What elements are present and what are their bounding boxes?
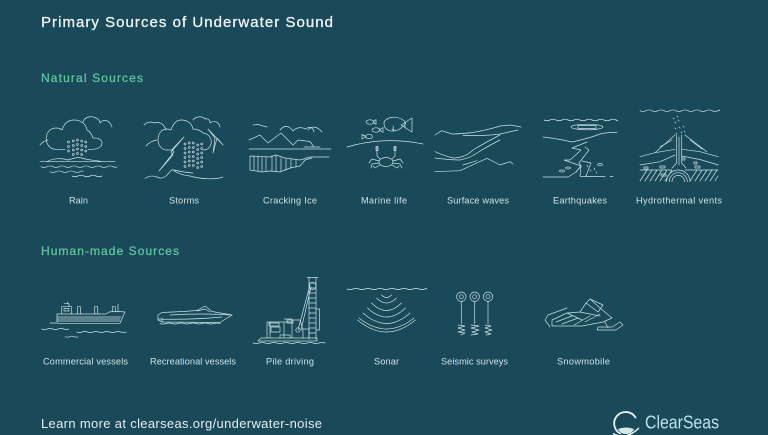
title: Primary Sources of Underwater Sound (41, 14, 333, 31)
label: storms: Storms (169, 196, 199, 206)
label: hydrothermal vents: Hydrothermal vents (636, 196, 722, 206)
icon: marine life (347, 117, 423, 168)
icon: seismic surveys (457, 292, 493, 335)
heading: human-made sources: Human-made Sources (41, 244, 179, 258)
icon: commercial vessels (42, 302, 126, 337)
label: surface waves: Surface waves (447, 196, 509, 206)
icon: snowmobile (545, 299, 623, 330)
footer link text: Learn more at clearseas.org/underwater-noise (41, 416, 322, 431)
label: rain: Rain (69, 196, 88, 206)
label: sonar: Sonar (374, 356, 399, 366)
label: seismic surveys: Seismic surveys (441, 356, 508, 366)
icon: sonar (347, 288, 427, 332)
icon: cracking ice (249, 124, 331, 172)
icon: earthquakes (543, 119, 618, 177)
icon: hydrothermal vents (640, 110, 720, 182)
icon: storms (144, 117, 223, 179)
label: cracking ice: Cracking Ice (263, 196, 317, 206)
icon: rain (40, 117, 117, 177)
logo: ClearSeas: ClearSeas (645, 412, 719, 432)
label: recreational vessels: Recreational vessels (150, 356, 236, 366)
label: pile driving: Pile driving (266, 356, 314, 366)
label: marine life: Marine life (361, 196, 407, 206)
label: earthquakes: Earthquakes (553, 196, 607, 206)
icon: recreational vessels (158, 306, 232, 324)
heading: natural sources: Natural Sources (41, 71, 143, 85)
label: commercial vessels: Commercial vessels (43, 356, 128, 366)
logo: ClearSeas (613, 412, 719, 435)
label: snowmobile: Snowmobile (557, 356, 610, 366)
icon: pile driving (253, 278, 325, 344)
icon: surface waves (435, 125, 521, 172)
